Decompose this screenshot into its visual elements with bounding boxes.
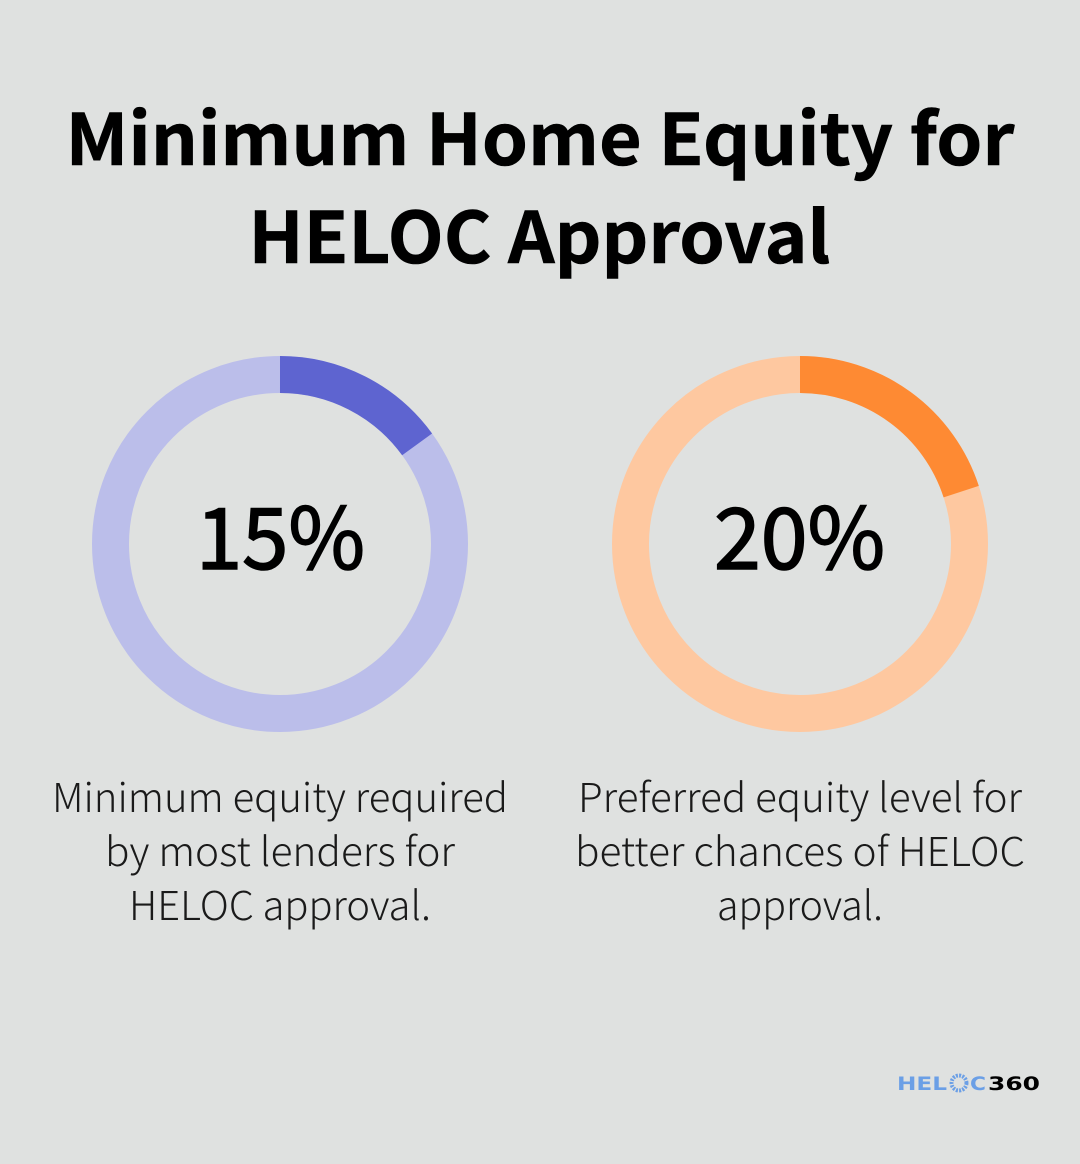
description: minimum equity <box>52 766 508 932</box>
value: 20%: 20% <box>714 471 885 594</box>
title: Minimum Home Equity for <box>66 84 1016 186</box>
description: preferred equity: better chances of HELOC <box>575 820 1025 878</box>
description: preferred equity: approval. <box>717 874 883 932</box>
icon: swirl O <box>952 1076 966 1090</box>
description: preferred equity <box>575 766 1025 932</box>
description: minimum equity: by most lenders for <box>105 820 456 878</box>
title: HELOC Approval <box>248 182 830 284</box>
panel: 15% minimum equity <box>52 374 508 932</box>
panel: 20% preferred equity <box>575 374 1025 932</box>
logo: HELOC360: 360 <box>988 1073 1040 1095</box>
donut chart: 15% <box>110 374 450 714</box>
description: minimum equity: HELOC approval. <box>129 874 431 932</box>
logo: HELOC360: C <box>970 1073 986 1095</box>
value: 15%: 15% <box>196 471 365 594</box>
logo: HELOC360 <box>897 1073 1040 1095</box>
logo: HELOC360: HEL <box>897 1073 947 1095</box>
donut chart: 20% <box>630 374 970 714</box>
description: preferred equity: Preferred equity level for <box>578 766 1023 824</box>
description: minimum equity: Minimum equity required <box>52 766 508 824</box>
title <box>66 84 1016 284</box>
